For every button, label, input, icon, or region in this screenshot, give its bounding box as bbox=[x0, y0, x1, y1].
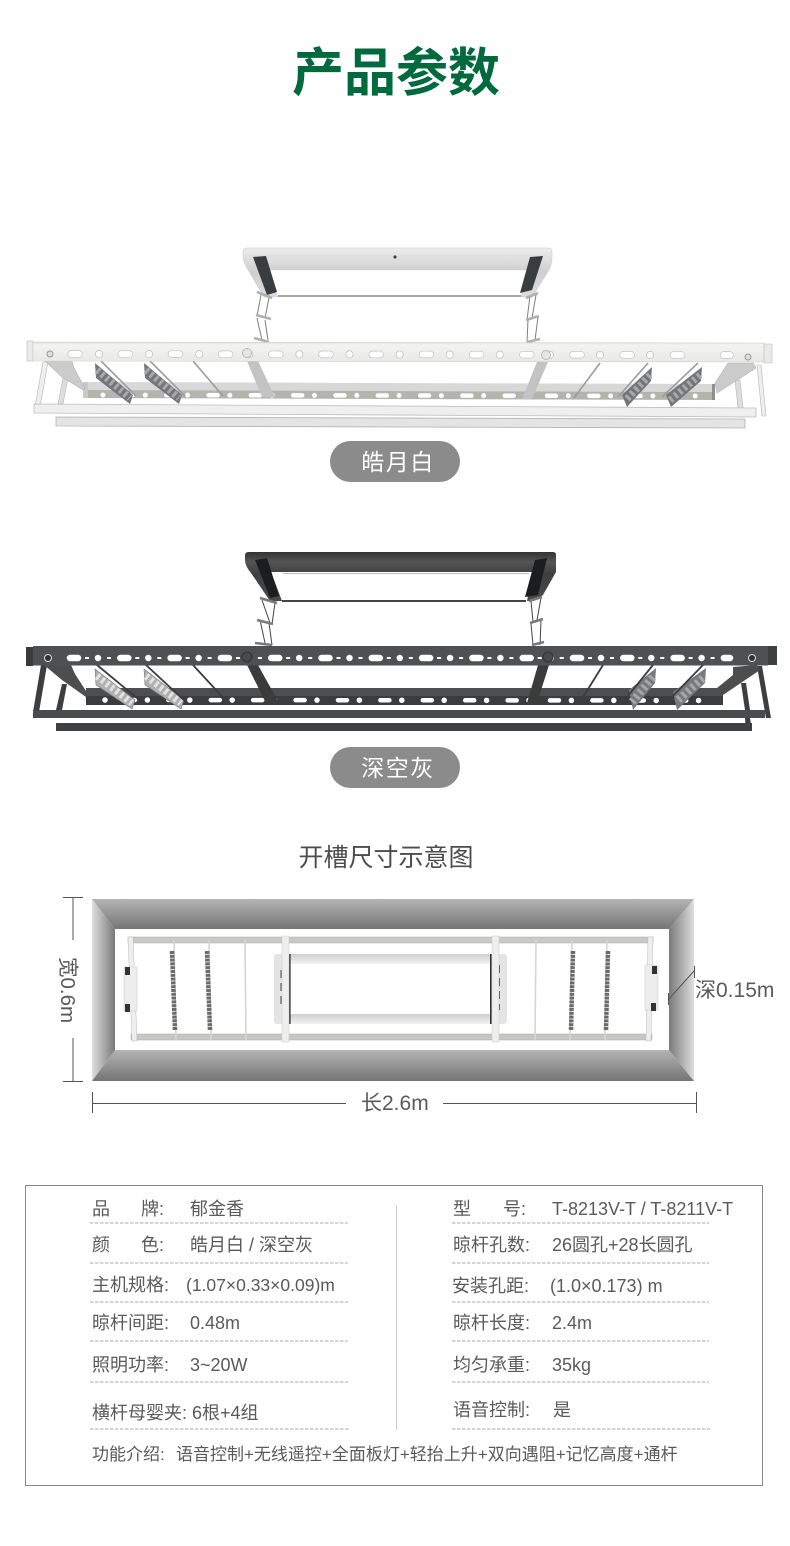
lower bar bbox=[83, 382, 715, 400]
spec: mount spacing bbox=[452, 1276, 663, 1296]
dimension: length 2.6m: 长2.6m bbox=[361, 1092, 429, 1115]
spec: voice control: 是 bbox=[553, 1400, 571, 1420]
lifting links bbox=[254, 292, 540, 342]
dimension: depth 0.15m bbox=[668, 966, 774, 1005]
spec: model: 型 bbox=[453, 1199, 471, 1219]
spec: host size bbox=[92, 1275, 335, 1295]
spec: host size: (1.07×0.33×0.09)m bbox=[186, 1275, 335, 1295]
spec: host size: 主机规格: bbox=[92, 1275, 169, 1295]
host panel: white bbox=[243, 248, 552, 297]
spec: rod holes: 26圆孔+28长圆孔 bbox=[552, 1235, 693, 1255]
spec: lighting power: 照明功率: bbox=[92, 1355, 169, 1375]
arms bbox=[247, 361, 548, 399]
spec: color bbox=[92, 1235, 313, 1255]
clips top view bbox=[172, 951, 608, 1030]
product: white drying rack bbox=[27, 248, 772, 428]
legs and brackets bbox=[33, 665, 771, 731]
spec: rod spacing bbox=[92, 1313, 240, 1333]
lower bar bbox=[86, 688, 723, 705]
host panel: dark bbox=[245, 552, 556, 602]
hanging clips bbox=[95, 363, 702, 407]
spec: lighting power: 3~20W bbox=[190, 1355, 248, 1375]
feature line: 功能介绍: bbox=[92, 1445, 165, 1464]
product: dark gray drying rack bbox=[26, 552, 777, 731]
spec: voice control bbox=[453, 1400, 571, 1420]
spec: voice control: 语音控制: bbox=[453, 1400, 530, 1420]
dimension: depth 0.15m: 深0.15m bbox=[695, 979, 774, 1002]
spec: rod holes: 晾杆孔数: bbox=[453, 1235, 530, 1255]
wide cross bars bbox=[282, 936, 289, 1042]
end plates bbox=[124, 967, 137, 1011]
spec: model bbox=[453, 1199, 733, 1219]
spec: brand: 牌: bbox=[141, 1199, 164, 1219]
front rods bbox=[33, 710, 765, 731]
spec: brand: 品 bbox=[92, 1199, 110, 1219]
spec: rod holes bbox=[453, 1235, 693, 1255]
spec: rod length: 晾杆长度: bbox=[453, 1313, 530, 1333]
spec: mount spacing: (1.0×0.173) m bbox=[550, 1276, 663, 1296]
front rods bbox=[34, 404, 756, 428]
legs and brackets bbox=[34, 361, 766, 417]
title: 产品参数 bbox=[292, 31, 500, 106]
spec: brand: 郁金香 bbox=[190, 1199, 244, 1219]
spec: load bbox=[453, 1355, 591, 1375]
arms bbox=[247, 665, 549, 703]
color pill: 皓月白: 皓月白 bbox=[361, 449, 435, 475]
dimension: width 0.6m: 宽0.6m bbox=[56, 957, 79, 1023]
spec: color: 皓月白 / 深空灰 bbox=[190, 1235, 313, 1255]
spec: color: 色: bbox=[141, 1235, 164, 1255]
spec: load: 均匀承重: bbox=[453, 1355, 530, 1375]
cross rods bbox=[97, 665, 703, 703]
lifting links bbox=[255, 597, 544, 645]
spec: color: 颜 bbox=[92, 1235, 110, 1255]
spec: rod length: 2.4m bbox=[552, 1313, 592, 1333]
rack top view bbox=[124, 936, 658, 1042]
cross rods bbox=[100, 360, 698, 398]
spec: mount spacing: 安装孔距: bbox=[452, 1276, 529, 1296]
color pill: 深空灰 bbox=[330, 747, 460, 788]
main bar bbox=[26, 646, 777, 666]
spec: lighting power bbox=[92, 1355, 248, 1375]
color pill: 皓月白 bbox=[330, 441, 460, 482]
spec: rod length bbox=[453, 1313, 592, 1333]
spec: model: T-8213V-T / T-8211V-T bbox=[552, 1199, 733, 1219]
spec: rod spacing: 0.48m bbox=[190, 1313, 240, 1333]
slot diagram bbox=[56, 897, 774, 1115]
heading: slot size diagram: 开槽尺寸示意图 bbox=[298, 844, 474, 872]
spec: load: 35kg bbox=[552, 1355, 591, 1375]
host panel top view bbox=[274, 954, 507, 1024]
hanging clips bbox=[95, 668, 706, 710]
feature line: 语音控制+无线遥控+全面板灯+轻抬上升+双向遇阻+记忆高度+通杆 bbox=[176, 1445, 678, 1464]
spec: brand bbox=[92, 1199, 244, 1219]
color pill: 深空灰: 深空灰 bbox=[361, 755, 435, 781]
main bar bbox=[27, 341, 772, 363]
spec: clips: 横杆母婴夹: 6根+4组 bbox=[92, 1403, 259, 1423]
slot walls bbox=[92, 899, 694, 1081]
spec: model: 号: bbox=[503, 1199, 526, 1219]
spec: rod spacing: 晾杆间距: bbox=[92, 1313, 169, 1333]
panel: specification table bbox=[26, 1186, 762, 1486]
